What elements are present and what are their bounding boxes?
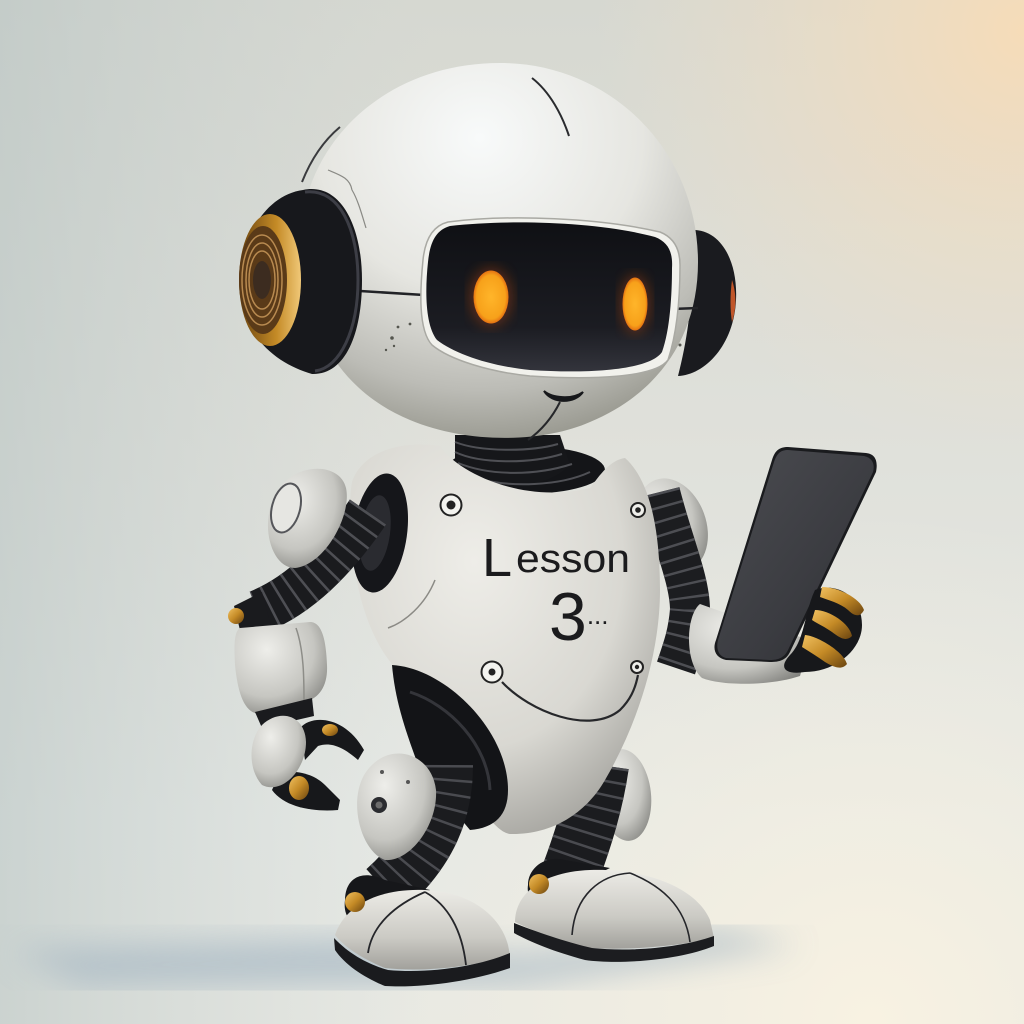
chest text: 3...: ...: [587, 600, 608, 630]
far arm: [624, 468, 810, 684]
far leg: [514, 747, 714, 962]
ear cup: [240, 189, 362, 374]
ankle cap: [345, 875, 430, 928]
wrist: [255, 698, 314, 728]
forearm cuff: [689, 604, 810, 684]
ground shadow: [10, 930, 800, 985]
left eye: [469, 267, 513, 327]
tablet: [714, 447, 877, 662]
lower screw left: [482, 662, 502, 682]
hip socket inner ring: [410, 692, 490, 790]
visor: [426, 222, 672, 371]
far shoe sole: [514, 923, 714, 962]
torso: [350, 444, 660, 834]
gold finger 1: [820, 587, 864, 615]
claw lower finger: [272, 772, 340, 810]
shoulder disc: [266, 480, 306, 536]
head shell: [301, 63, 698, 438]
tablet screen: [717, 450, 874, 660]
near arm upper: [228, 469, 415, 630]
stud: [345, 892, 365, 912]
near knee ball: [357, 753, 436, 860]
finger gold: [289, 776, 309, 800]
visor rim: [421, 218, 680, 378]
head: [301, 63, 698, 440]
speaker gold: [239, 214, 301, 346]
far shoe: [515, 870, 714, 949]
chest screw right: [631, 503, 645, 517]
speckles: [385, 323, 682, 351]
hip socket: [392, 665, 508, 830]
elbow joint: [234, 592, 272, 630]
chest text: Lesson: L: [482, 528, 512, 588]
head seams: [532, 78, 569, 136]
forearm and hand: [235, 622, 364, 810]
torso shell: [350, 444, 660, 834]
near arm spring: [258, 512, 368, 612]
elbow stud: [228, 608, 244, 624]
shoe upper: [335, 890, 510, 969]
hip socket and near leg: [357, 665, 508, 890]
near leg spring: [385, 765, 445, 890]
chest text: 3...: 3: [549, 579, 587, 655]
far shoulder: [624, 468, 720, 582]
sole: [334, 938, 510, 986]
speaker rings: [242, 235, 282, 325]
palm: [252, 716, 306, 787]
hand dark: [784, 588, 862, 673]
hand on tablet: [784, 587, 864, 673]
far shoe gold stud: [529, 874, 549, 894]
right eye: [619, 274, 651, 334]
gold finger 2: [812, 610, 852, 639]
near ear: [239, 189, 362, 374]
gold finger 3: [802, 635, 847, 668]
mouth: [544, 391, 583, 401]
near foot: [334, 875, 510, 986]
far ankle cap: [528, 859, 610, 905]
near forearm cuff: [235, 622, 327, 714]
torso smile: [502, 675, 638, 721]
neck: [445, 435, 605, 494]
far knee: [594, 747, 656, 843]
chest text: Lesson: esson: [516, 537, 630, 581]
claw upper finger: [300, 720, 364, 760]
far ear: [678, 230, 736, 376]
chest screw left: [440, 494, 462, 516]
shoulder ball: [268, 469, 347, 568]
shoulder socket: [345, 470, 415, 596]
far leg spring: [568, 765, 600, 880]
lower screw right: [631, 661, 643, 673]
far arm spring: [660, 492, 690, 668]
